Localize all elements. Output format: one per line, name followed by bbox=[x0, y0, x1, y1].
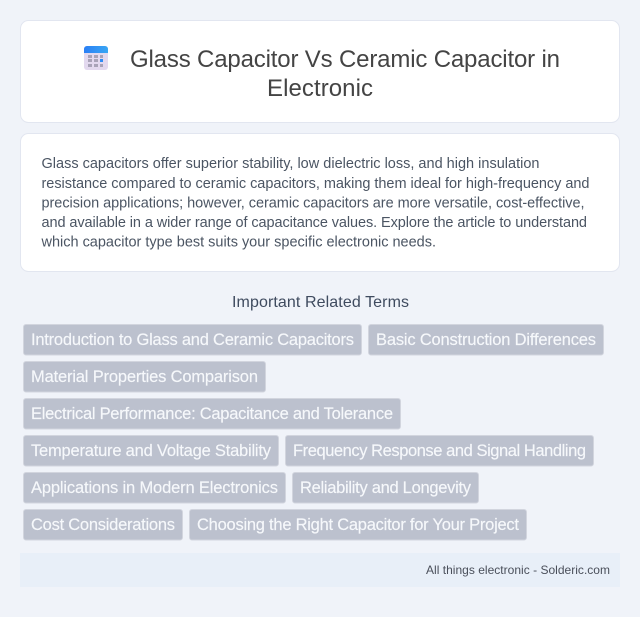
heading: important related terms: Important Related Terms bbox=[232, 294, 409, 311]
chip: material bbox=[24, 362, 266, 392]
chip: introduction bbox=[24, 324, 362, 355]
summary text bbox=[40, 156, 590, 250]
summary text: Glass capacitors offer superior stability, low dielectric loss, and high insulation bbox=[42, 156, 540, 172]
title: Electronic bbox=[267, 75, 373, 102]
summary text: and available in a wider range of capacitance values. Explore the article to understand bbox=[42, 215, 587, 231]
panel: related term chips bbox=[24, 324, 604, 540]
chip: choosing bbox=[190, 510, 526, 540]
summary text: precision applications; however, ceramic capacitors are more versatile, cost-effective, bbox=[42, 196, 584, 212]
title: Glass Capacitor Vs Ceramic Capacitor in bbox=[130, 46, 560, 73]
summary text: resistance compared to ceramic capacitors, making them ideal for high-frequency and bbox=[42, 176, 590, 192]
icon: capacitor calendar grid bbox=[84, 46, 108, 70]
chip: frequency bbox=[286, 436, 594, 466]
chip: electrical bbox=[24, 398, 400, 429]
summary text: which capacitor type best suits your specific electronic needs. bbox=[40, 234, 436, 250]
chip: cost: Cost Considerations bbox=[31, 516, 175, 534]
title bbox=[130, 46, 560, 102]
chip: temperature: Temperature and Voltage Stability bbox=[31, 442, 272, 460]
chip: reliability: Reliability and Longevity bbox=[300, 479, 472, 497]
chip: introduction: Introduction to Glass and Ceramic Capacitors bbox=[31, 331, 354, 349]
chip: applications bbox=[24, 472, 286, 503]
chip: choosing: Choosing the Right Capacitor for Your Project bbox=[197, 516, 519, 534]
panel: summary card bbox=[20, 134, 620, 272]
chip: temperature bbox=[24, 436, 278, 466]
footer text: All things electronic - Solderic.com bbox=[426, 563, 610, 577]
chip: construction bbox=[368, 324, 604, 355]
chip: cost bbox=[24, 510, 182, 540]
chip: electrical: Electrical Performance: Capacitance and Tolerance bbox=[31, 405, 393, 423]
chip: applications: Applications in Modern Electronics bbox=[31, 479, 278, 497]
panel: title card bbox=[20, 20, 620, 122]
chip: construction: Basic Construction Differences bbox=[376, 331, 596, 349]
chip: material: Material Properties Comparison bbox=[31, 368, 258, 386]
chip: reliability bbox=[292, 472, 478, 503]
chip: frequency: Frequency Response and Signal Handling bbox=[293, 442, 586, 460]
footer band bbox=[20, 553, 620, 587]
